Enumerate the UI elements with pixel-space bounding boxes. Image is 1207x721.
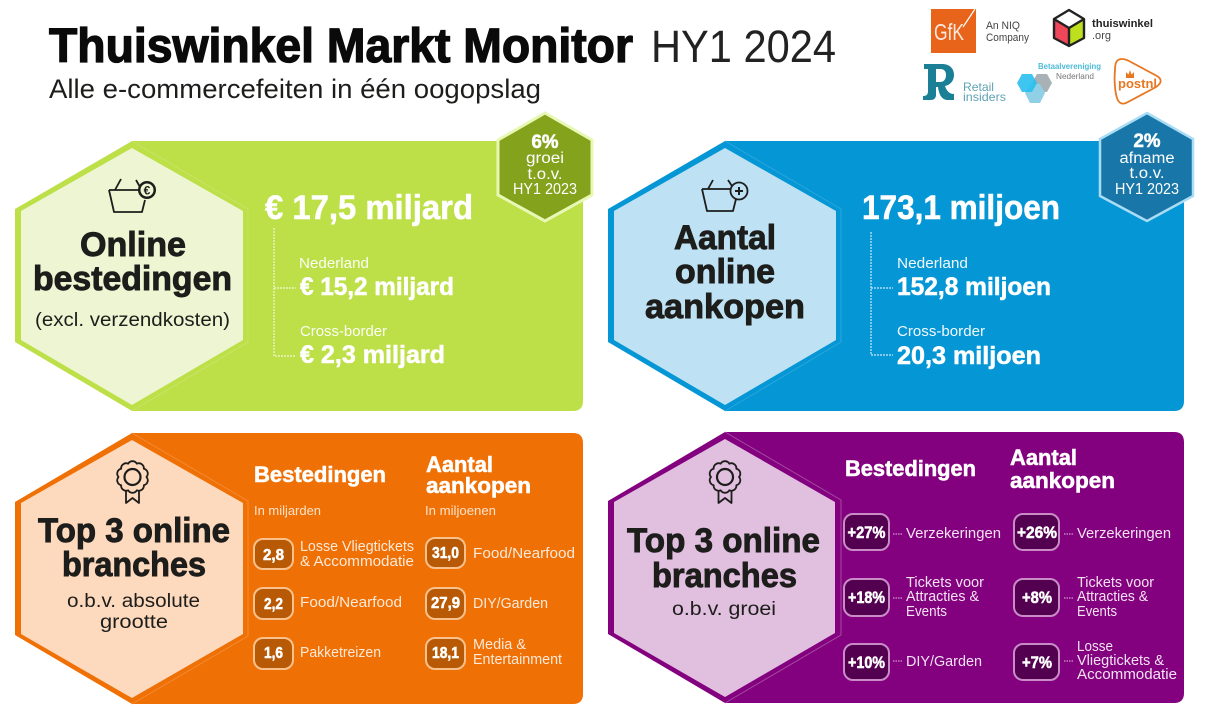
breakdown connector <box>274 228 296 356</box>
logo: GfK: An NIQ <box>986 20 1020 32</box>
column: bestedingen: Bestedingen <box>845 456 976 481</box>
row: +18%: Tickets voor <box>906 574 984 591</box>
breakdown Nederland: Nederland <box>897 256 968 272</box>
badge: 2% decline: HY1 2023 <box>1115 181 1179 198</box>
hexagon: online bestedingen: bestedingen <box>33 260 232 298</box>
hexagon: top 3 absolute: branches <box>62 546 206 584</box>
breakdown cross-border <box>300 324 445 369</box>
row: 2,2: Food/Nearfood <box>300 594 402 611</box>
subtitle: Alle e-commercefeiten in één oogopslag <box>49 74 541 104</box>
title: Thuiswinkel Markt Monitor <box>49 20 633 73</box>
icon: rosette <box>117 461 148 503</box>
column: bestedingen: Bestedingen <box>254 462 386 487</box>
logo: thuiswinkel.org <box>1054 10 1153 46</box>
row: +7% <box>1014 638 1177 683</box>
hexagon: aantal online aankopen: online <box>675 253 775 291</box>
row: +7%: +7% <box>1022 653 1052 672</box>
breakdown Nederland: Nederland <box>299 256 369 272</box>
badge: 6% growth: t.o.v. <box>528 166 562 183</box>
logo: GfK: GfK <box>934 19 964 45</box>
icon: basket with plus <box>702 180 748 211</box>
logo: Betaalvereniging Nederland <box>1017 61 1101 103</box>
column: aantal aankopen <box>1010 445 1177 683</box>
icon: basket with euro: € <box>144 184 151 198</box>
logo: PostNL <box>1115 59 1161 104</box>
row: +10%: DIY/Garden <box>906 653 982 670</box>
badge: 2% decline: afname <box>1120 150 1174 167</box>
column: aantal aankopen: aankopen <box>1010 468 1115 493</box>
subheading: o.b.v. groei <box>672 599 776 620</box>
row: +10%: +10% <box>848 653 885 672</box>
row: +8% <box>1014 574 1154 620</box>
total value: 173,1 miljoen <box>862 189 1060 227</box>
breakdown cross-border <box>897 324 1041 370</box>
logo: Betaalvereniging Nederland: Nederland <box>1056 72 1094 81</box>
row: +27%: Verzekeringen <box>906 525 1001 542</box>
row: 27,9 <box>426 588 548 619</box>
breakdown connector <box>871 232 893 355</box>
column: bestedingen: In miljarden <box>254 504 321 518</box>
row: 31,0: Food/Nearfood <box>473 545 575 562</box>
row: 1,6: Pakketreizen <box>300 644 381 661</box>
row: 2,8: 2,8 <box>263 547 284 564</box>
panel background <box>15 433 583 704</box>
logo: Retail Insiders <box>923 64 1006 104</box>
hexagon: top 3 growth: branches <box>652 557 797 595</box>
badge: 2% decline: 2% <box>1134 131 1161 152</box>
partner logos <box>923 9 1161 104</box>
breakdown Nederland <box>299 256 454 301</box>
row: 18,1 <box>426 636 563 669</box>
row: +26%: Verzekeringen <box>1077 525 1171 542</box>
panel: aantal online aankopen <box>608 113 1193 411</box>
logo: GfK: Company <box>986 32 1029 44</box>
hexagon: top 3 absolute: grootte <box>100 612 168 633</box>
column: bestedingen <box>844 456 1001 680</box>
column: aantal aankopen <box>425 452 575 669</box>
badge: 6% growth: 6% <box>532 132 559 153</box>
row: +27% <box>844 514 1001 550</box>
row: +18% <box>844 574 984 620</box>
row: 2,8: Losse Vliegtickets <box>300 538 414 555</box>
total value: € 17,5 miljard <box>265 189 473 227</box>
breakdown cross-border: 20,3 miljoen <box>897 342 1041 370</box>
row: +7%: Accommodatie <box>1077 666 1177 683</box>
badge: 6% growth: HY1 2023 <box>513 181 577 198</box>
badge: 6% growth <box>498 113 592 221</box>
row: 31,0 <box>426 538 575 568</box>
icon: rosette <box>710 461 740 503</box>
badge: 2% decline: t.o.v. <box>1130 165 1164 182</box>
row: +7%: Losse <box>1077 638 1113 655</box>
logo: thuiswinkel.org: .org <box>1092 30 1111 42</box>
breakdown cross-border: € 2,3 miljard <box>300 341 445 369</box>
column: bestedingen <box>254 462 414 669</box>
hexagon: top 3 growth <box>614 432 841 703</box>
row: +10% <box>844 644 982 680</box>
row: 31,0: 31,0 <box>432 545 459 562</box>
breakdown Nederland <box>897 256 1051 301</box>
row: 27,9: DIY/Garden <box>473 595 548 612</box>
logo: thuiswinkel.org: thuiswinkel <box>1092 18 1153 30</box>
row: +18%: Attracties & <box>906 588 979 605</box>
panel: top 3 online branches growth <box>608 432 1184 703</box>
row: 18,1: Media & <box>473 636 526 653</box>
breakdown Nederland: 152,8 miljoen <box>897 273 1051 301</box>
breakdown Nederland: € 15,2 miljard <box>300 273 454 301</box>
heading: Online <box>80 226 186 264</box>
row: 2,8: & Accommodatie <box>300 553 414 570</box>
logo: Retail Insiders: Retail <box>963 80 994 94</box>
row: 2,2 <box>254 588 402 619</box>
row: +8%: Events <box>1077 603 1117 620</box>
panel: online bestedingen <box>15 113 592 411</box>
column: aantal aankopen: In miljoenen <box>425 504 496 518</box>
title: HY1 2024 <box>651 21 836 72</box>
row: 1,6: 1,6 <box>264 645 283 662</box>
row: 27,9: 27,9 <box>431 595 460 612</box>
row: 2,2: 2,2 <box>264 596 283 613</box>
row: +18%: Events <box>906 603 947 620</box>
column: aantal aankopen: Aantal <box>426 452 493 477</box>
row: 18,1: Entertainment <box>473 651 563 668</box>
hexagon: aantal online aankopen <box>614 141 841 411</box>
hexagon: online bestedingen <box>21 141 248 411</box>
row: +26%: +26% <box>1017 523 1057 542</box>
row: +27%: +27% <box>848 523 886 542</box>
row: +8%: Attracties & <box>1077 588 1148 605</box>
row: +26% <box>1014 514 1171 550</box>
logo: Retail Insiders: insiders <box>963 90 1006 104</box>
heading: Top 3 online <box>627 522 820 560</box>
row: +8%: +8% <box>1022 588 1052 607</box>
logo: Betaalvereniging Nederland: Betaalvereniging <box>1038 61 1101 71</box>
row: 2,8 <box>254 538 414 570</box>
icon: basket with euro <box>109 179 156 212</box>
row: +18%: +18% <box>848 588 885 607</box>
row: +8%: Tickets voor <box>1077 574 1154 591</box>
breakdown cross-border: Cross-border <box>300 324 387 340</box>
panel: top 3 online branches absolute <box>15 433 583 704</box>
row: 1,6 <box>254 638 381 669</box>
logo: PostNL: postnl <box>1118 76 1157 91</box>
subheading: (excl. verzendkosten) <box>35 310 230 331</box>
logo: GfK <box>931 9 1029 53</box>
breakdown cross-border: Cross-border <box>897 324 985 340</box>
hexagon: aantal online aankopen: aankopen <box>645 288 805 326</box>
row: 18,1: 18,1 <box>432 645 459 662</box>
column: aantal aankopen: Aantal <box>1010 445 1077 470</box>
panel background <box>608 432 1184 703</box>
panel background <box>15 141 583 411</box>
badge: 2% decline <box>1100 113 1193 221</box>
panel background <box>608 141 1184 411</box>
hexagon: top 3 absolute <box>21 433 248 704</box>
row: +7%: Vliegtickets & <box>1077 652 1164 669</box>
heading: Top 3 online <box>38 512 230 550</box>
badge: 6% growth: groei <box>526 150 564 167</box>
column: aantal aankopen: aankopen <box>426 473 531 498</box>
heading: Aantal <box>674 219 776 257</box>
subheading: o.b.v. absolute <box>67 591 200 612</box>
